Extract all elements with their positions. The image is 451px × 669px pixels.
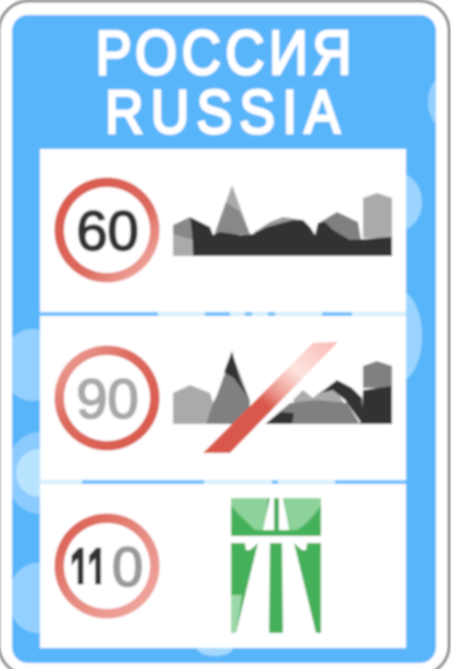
speed limit 110	[59, 518, 155, 614]
icon: motorway symbol	[231, 498, 321, 633]
speed limit 60: 60	[76, 199, 139, 262]
speed limit 110: 0	[112, 535, 143, 598]
title: RUSSIA: RUSSIA	[105, 79, 341, 147]
row: 90 outside built-up area	[59, 342, 392, 453]
divider row 1 / row 2	[40, 312, 406, 316]
speed limit 60	[59, 182, 155, 278]
panel: white speed table	[40, 149, 406, 648]
divider row 2 / row 3	[40, 480, 406, 484]
icon: crossed-out city silhouette	[173, 351, 392, 424]
row: 60 in built-up area	[59, 182, 392, 278]
speed limit 90	[59, 350, 155, 446]
speed limit 90: 90	[76, 367, 139, 430]
title: РОССИЯ: РОССИЯ	[96, 19, 351, 88]
speed limit 110: 11	[69, 536, 108, 607]
row: 110 on motorway	[59, 498, 321, 633]
icon: city silhouette	[173, 185, 392, 256]
icon: red strike-through bar	[203, 342, 338, 453]
